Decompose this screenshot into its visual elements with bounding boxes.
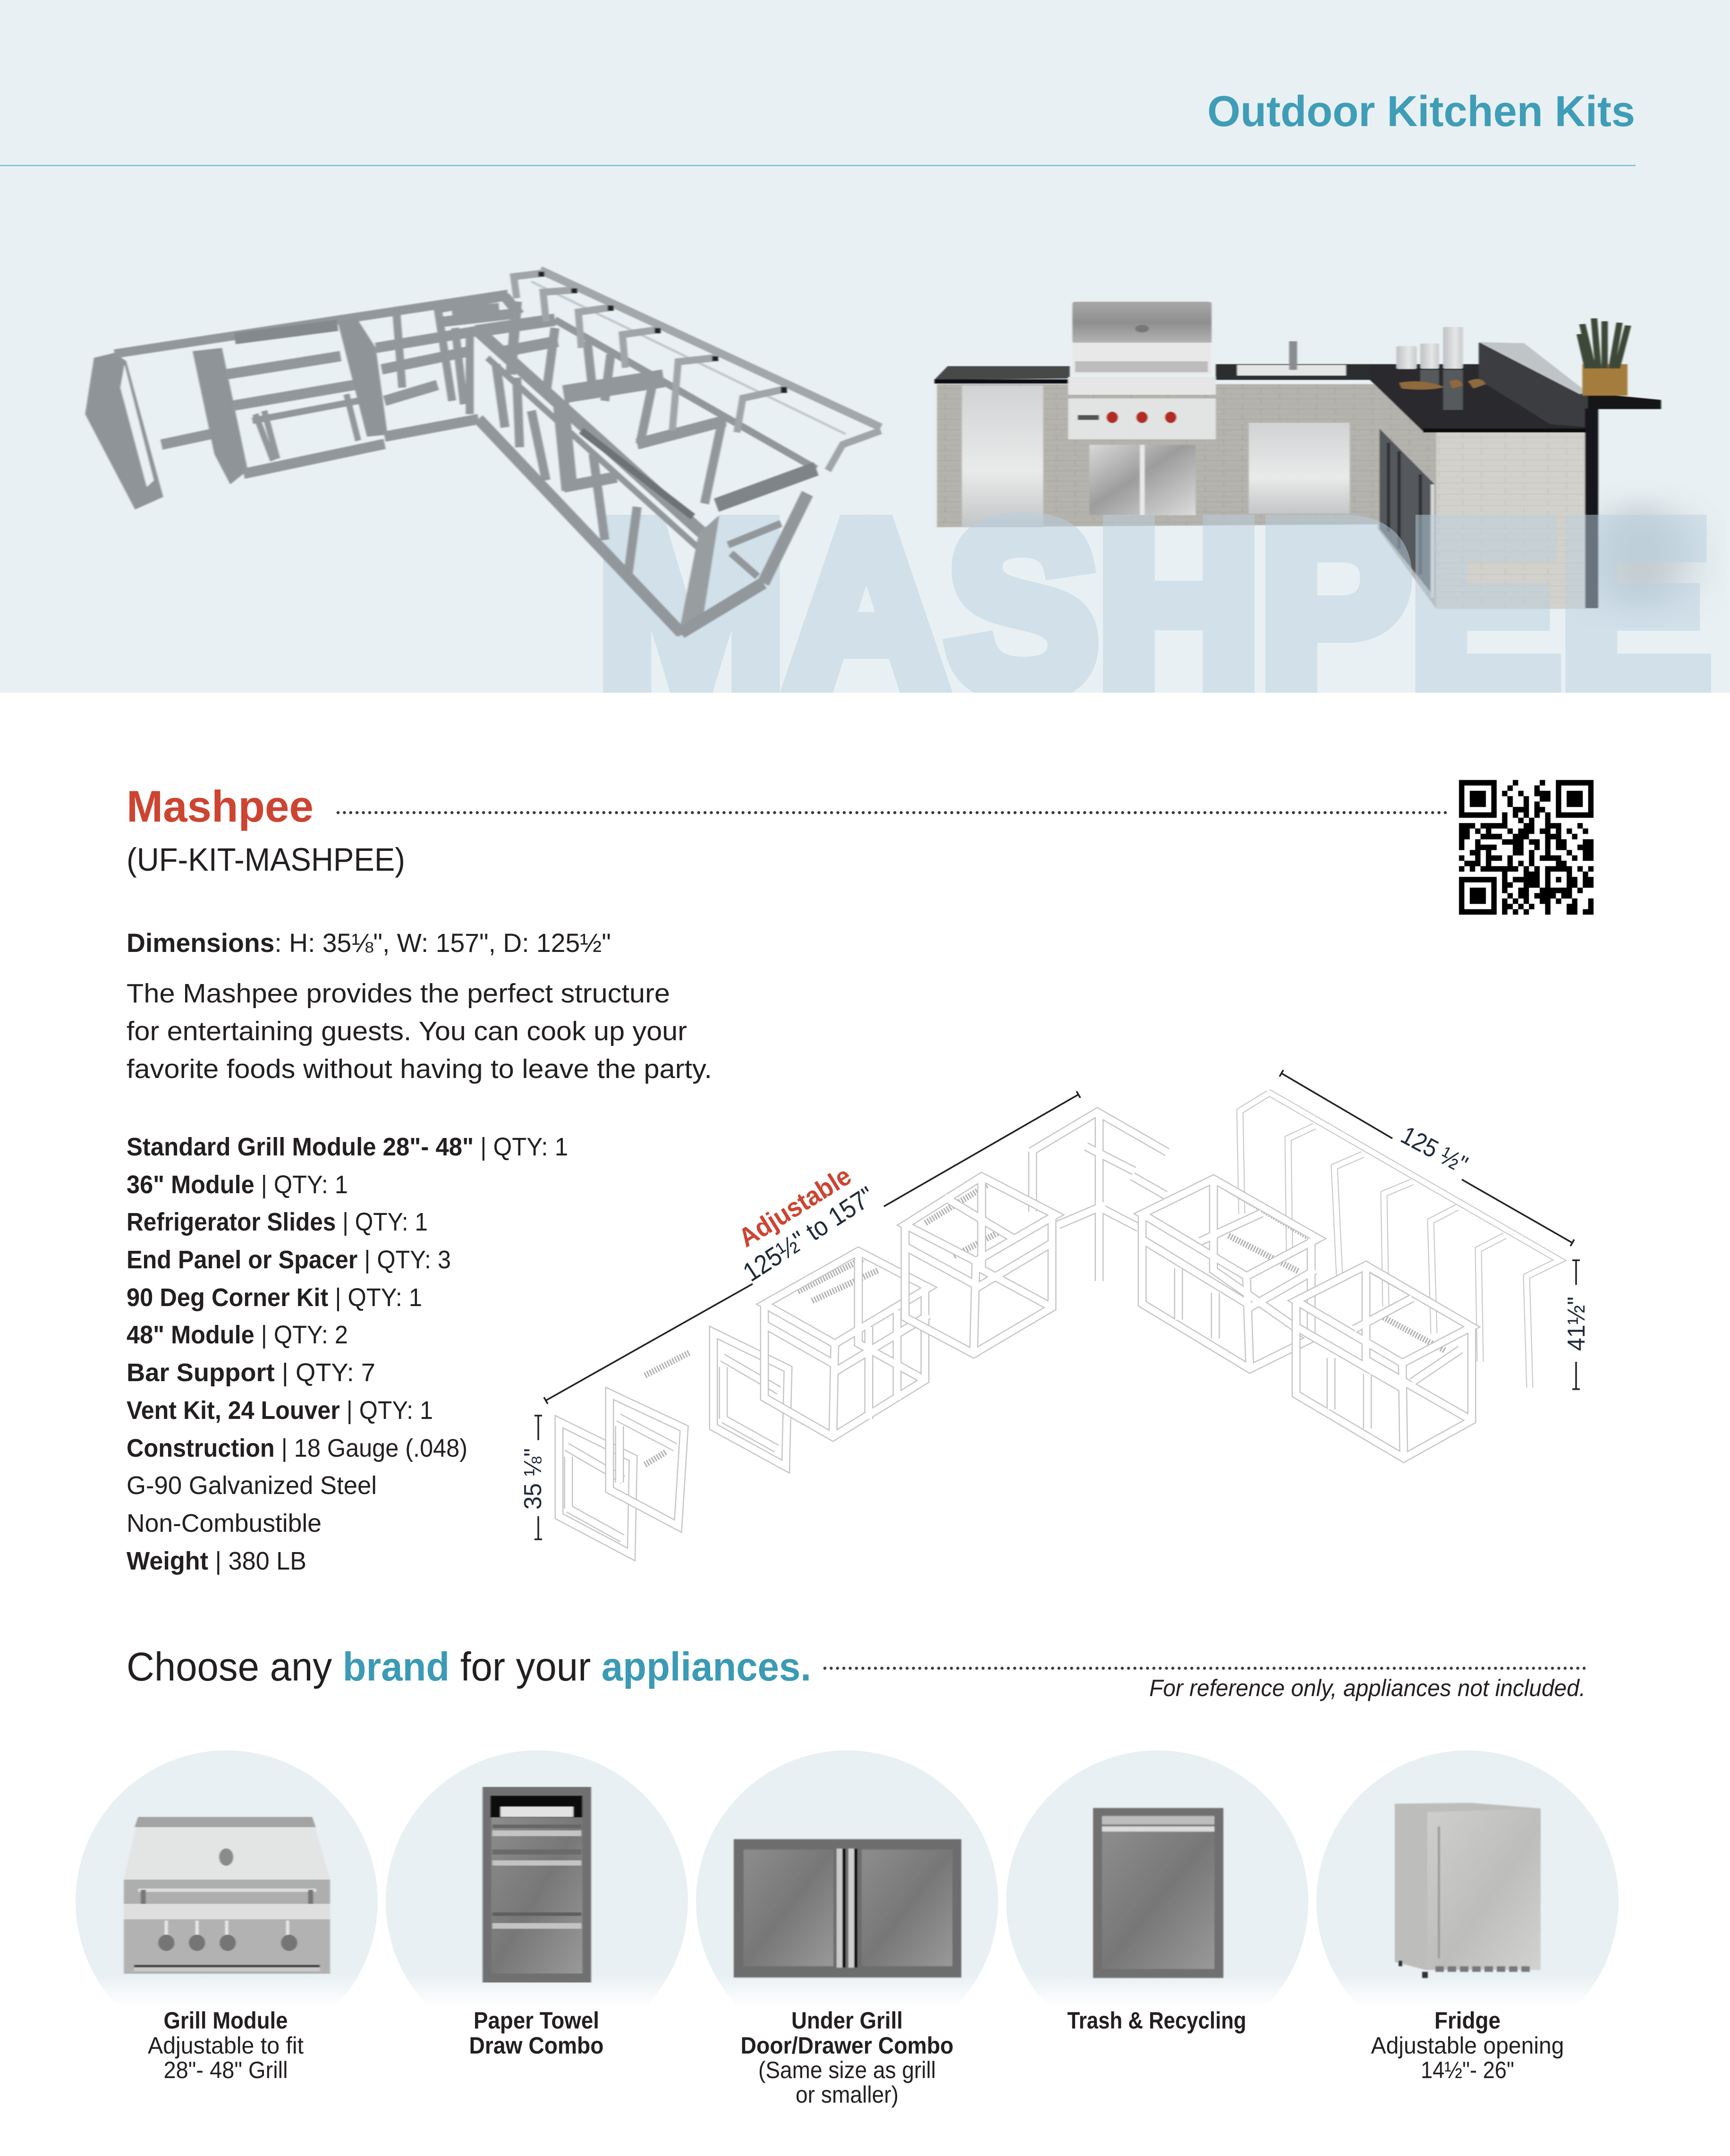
label: width range: 125½" to 157" [738,1180,880,1287]
double door image [734,1839,961,1978]
under grill doors [1089,445,1196,515]
label [1371,2007,1564,2083]
product: under grill door/drawer combo [696,1750,998,2108]
vases [1397,346,1416,369]
label: or smaller) [796,2081,899,2108]
long wing top rail [475,320,704,535]
parts and specification list: Construction | 18 Gauge (.048) [127,1434,467,1462]
parts and specification list: Vent Kit, 24 Louver | QTY: 1 [127,1396,433,1425]
rails of second run [376,331,479,437]
black leg [1585,408,1598,608]
hero panel [0,0,1730,742]
label [469,2007,603,2059]
parts and specification list: Bar Support | QTY: 7 [127,1358,375,1387]
36 inch module B [905,1177,1056,1354]
label: 28"- 48" Grill [163,2057,288,2083]
parts and specification list: Standard Grill Module 28"- 48" | QTY: 1 [127,1133,568,1161]
label: Draw Combo [469,2032,603,2059]
long back top rail [115,294,508,354]
end panel [85,353,163,509]
dimension line: depth [1280,1070,1574,1246]
description paragraph: The Mashpee provides the perfect structure [127,978,670,1009]
48 inch module D [1296,1265,1472,1458]
photo: galvanized steel frame [85,270,881,637]
label: (Same size as grill [758,2057,936,2083]
wing cross bars [505,341,725,487]
label [740,2007,954,2108]
rails of first run [226,356,385,474]
parts and specification list: 48" Module | QTY: 2 [127,1321,348,1349]
brick base, front face [1436,433,1586,609]
label: Trash & Recycling [1067,2007,1247,2034]
end panel 2 [610,1393,684,1526]
model number: (UF-KIT-MASHPEE) [127,841,405,878]
parts and specification list: Non-Combustible [127,1509,322,1537]
raised bar [1479,343,1587,427]
planter [1582,364,1628,396]
corner frame [1031,1112,1167,1281]
exploded wireframe diagram [519,1070,1590,1554]
product: paper towel draw combo [386,1750,688,2059]
product: fridge [1316,1750,1619,2083]
bar supports [514,273,881,470]
label: Door/Drawer Combo [740,2032,954,2059]
description paragraph: for entertaining guests. You can cook up your [127,1016,687,1046]
left countertop [934,366,1070,380]
parts and specification list: Refrigerator Slides | QTY: 1 [127,1208,428,1236]
dimension line: bar height [1572,1260,1580,1389]
bar support brackets [542,272,784,393]
description paragraph [127,978,712,1084]
label: Grill Module [163,2007,288,2034]
third upright [338,319,388,437]
grill control panel [1068,399,1216,440]
stainless doors on return [1380,428,1434,597]
QR code [1459,783,1594,912]
fridge image [1395,1803,1541,1978]
label: Adjustable opening [1371,2032,1564,2059]
parts and specification list: 36" Module | QTY: 1 [127,1171,348,1199]
lower connector rail [161,433,214,445]
parts and specification list: End Panel or Spacer | QTY: 3 [127,1246,451,1274]
brick base, return side [1378,383,1436,609]
front post [678,515,719,637]
paper towel image [483,1787,591,1983]
bar supports [1240,1092,1560,1388]
countertop reflections [1420,370,1463,410]
photo: finished outdoor kitchen [934,302,1688,611]
wing bottom rail [479,419,681,633]
parts and specification list: G-90 Galvanized Steel [127,1471,377,1500]
food on counter [1399,379,1485,390]
parts and specification list [127,1133,568,1575]
label: counter height: 35 ⅛" [519,1448,547,1510]
label: Paper Towel [474,2007,599,2034]
bar top [1587,393,1661,409]
heading: choose any brand: Choose any brand for your appliances. [127,1645,811,1689]
end panel 1 [559,1422,633,1554]
second upright [193,348,248,484]
parts and specification list: 90 Deg Corner Kit | QTY: 1 [127,1283,422,1312]
hero background [0,0,1730,693]
brick base, long side [937,384,1378,527]
label: Under Grill [791,2007,903,2034]
title rule [0,165,1636,166]
label [148,2007,304,2083]
label: depth: 125 ½" [1396,1121,1472,1179]
dimension line: counter height [534,1416,542,1539]
parts and specification list: Weight | 380 LB [127,1547,306,1575]
label: Adjustable to fit [148,2032,304,2059]
drawer slides [581,431,693,517]
wing uprights [496,328,722,573]
L countertop [1370,364,1587,432]
description paragraph: favorite foods without having to leave the party. [127,1054,712,1084]
grill hood [1072,302,1212,343]
48 inch module A [764,1251,929,1437]
center access door [1249,423,1349,514]
end panel 3 [713,1333,788,1467]
label: 14½"- 26" [1421,2057,1514,2083]
product: trash and recycling [1006,1750,1308,2053]
refrigerator door [962,386,1043,527]
dimensions line: Dimensions: H: 35⅛", W: 157", D: 125½" [127,928,611,958]
heading: Mashpee: Mashpee [127,781,314,831]
trash door image [1093,1808,1223,1978]
title: Outdoor Kitchen Kits [1207,87,1635,136]
reference note: For reference only, appliances not included. [1149,1675,1586,1701]
corner box [437,296,520,374]
middle countertop and sink [1216,364,1373,380]
dimension line: width [544,1091,1080,1404]
label: Adjustable: Adjustable [733,1161,857,1253]
grill module C [1142,1179,1318,1369]
spacer slats [645,1352,690,1465]
right post and bottom [681,493,807,633]
kitchen floor shadow [1593,503,1688,611]
label: bar height: 41½" [1563,1297,1590,1351]
bar rail [540,270,881,427]
label: Fridge [1434,2007,1501,2034]
product: grill module [76,1750,378,2083]
grill image [124,1817,330,1974]
